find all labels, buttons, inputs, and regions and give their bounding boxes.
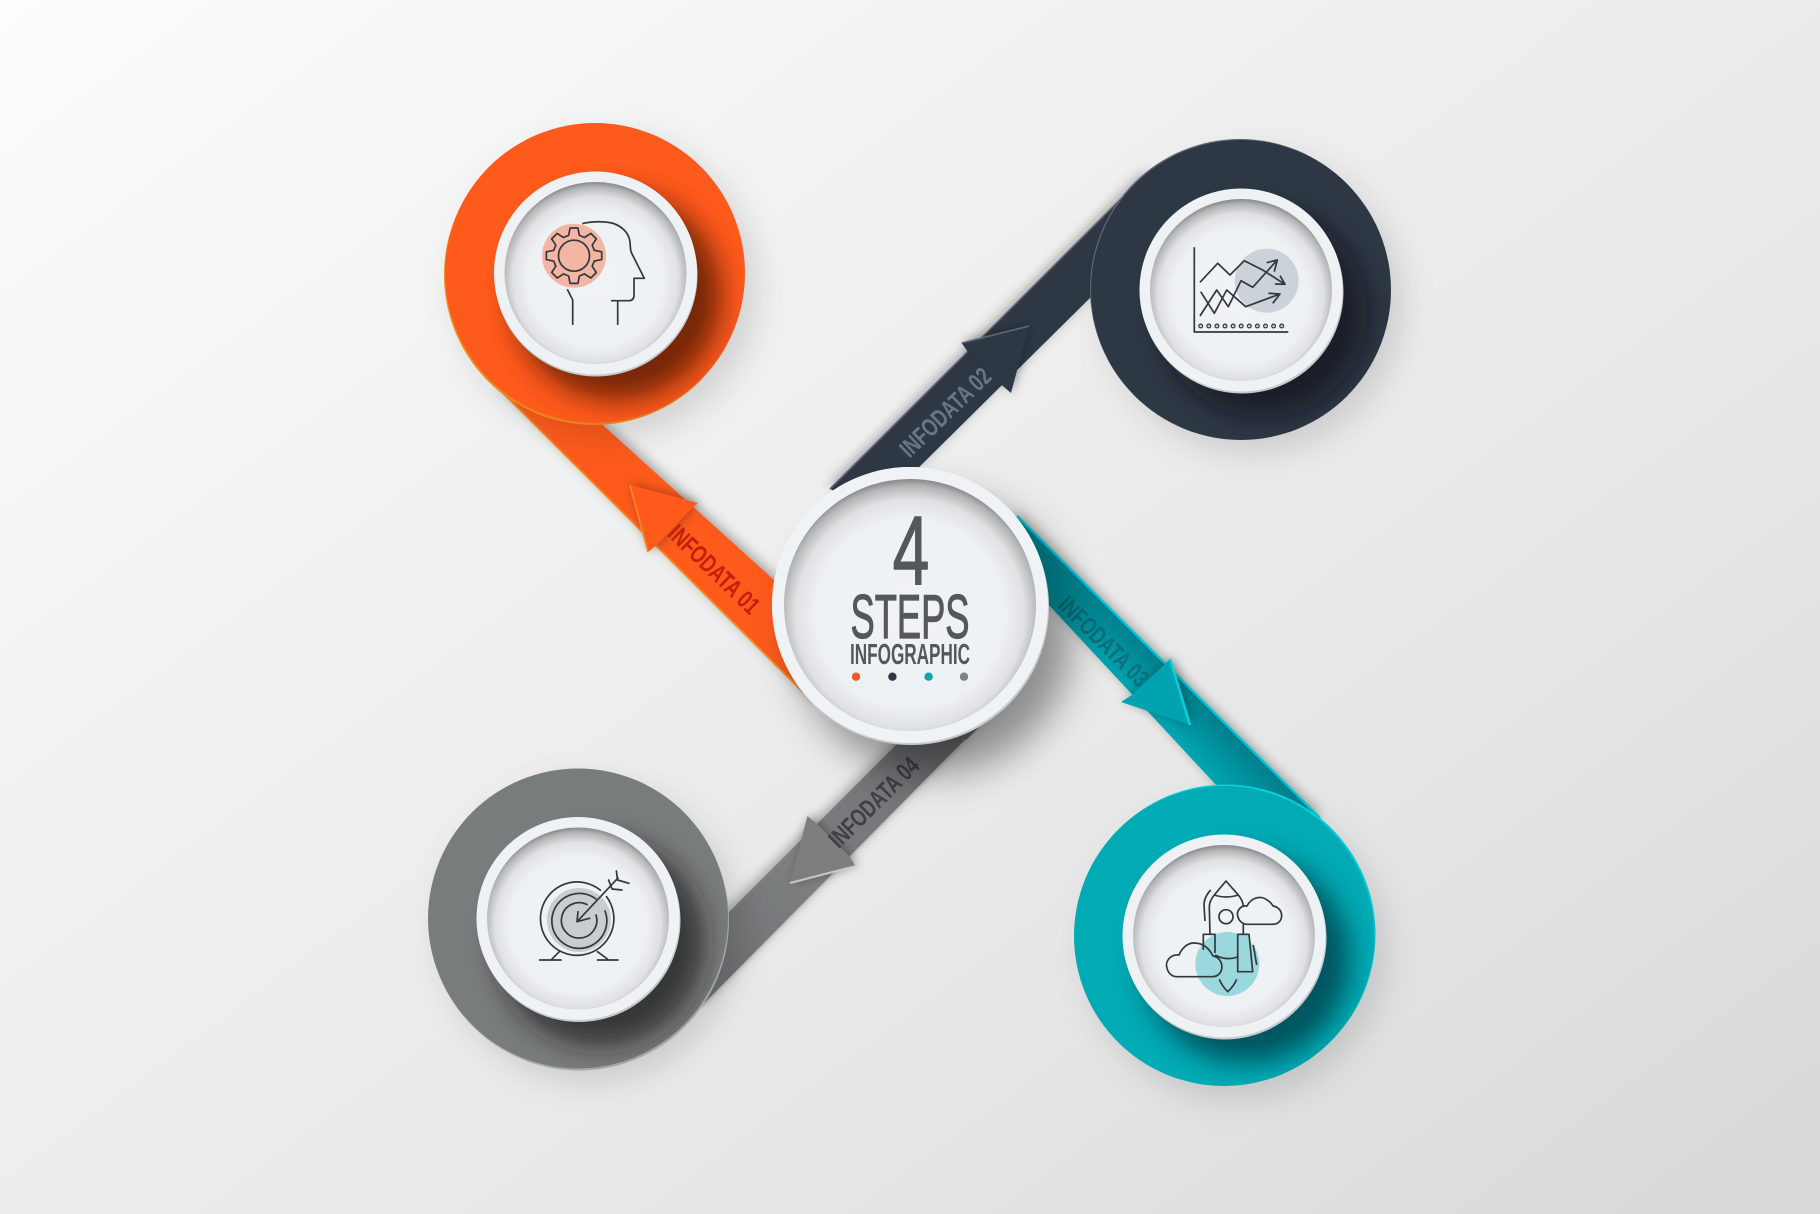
subtitle: infographic: INFOGRAPHIC: [850, 639, 970, 671]
label: infodata 02: INFODATA 02: [894, 362, 997, 463]
label: infodata 04: INFODATA 04: [823, 752, 925, 854]
icon: line chart with arrows: [1194, 247, 1299, 332]
step 3 disc: teal: [1074, 784, 1376, 1086]
icon: target with arrow: [536, 871, 629, 960]
arrowhead 04: [790, 816, 856, 883]
step 1 disc: orange: [444, 123, 745, 425]
ribbon arrow: infodata 03: [980, 516, 1320, 900]
title: 4: 4: [893, 496, 929, 605]
center disc: [772, 467, 1049, 745]
title: steps: STEPS: [850, 583, 970, 652]
ribbon arrow: infodata 04: [650, 650, 990, 1007]
icon: head with gear: [542, 222, 644, 325]
legend dots: [852, 672, 968, 681]
arrowhead 03: [1121, 659, 1190, 725]
icon: rocket with clouds: [1166, 881, 1282, 996]
ribbon arrow: infodata 02: [830, 175, 1200, 520]
label: infodata 03: INFODATA 03: [1052, 591, 1154, 693]
arrowhead 01: [630, 485, 698, 552]
step 2 disc: dark: [1090, 139, 1391, 440]
label: infodata 01: INFODATA 01: [662, 519, 765, 620]
ribbon arrow: infodata 01: [500, 350, 835, 705]
arrowhead 02: [962, 326, 1029, 393]
step 4 disc: gray: [428, 768, 729, 1070]
